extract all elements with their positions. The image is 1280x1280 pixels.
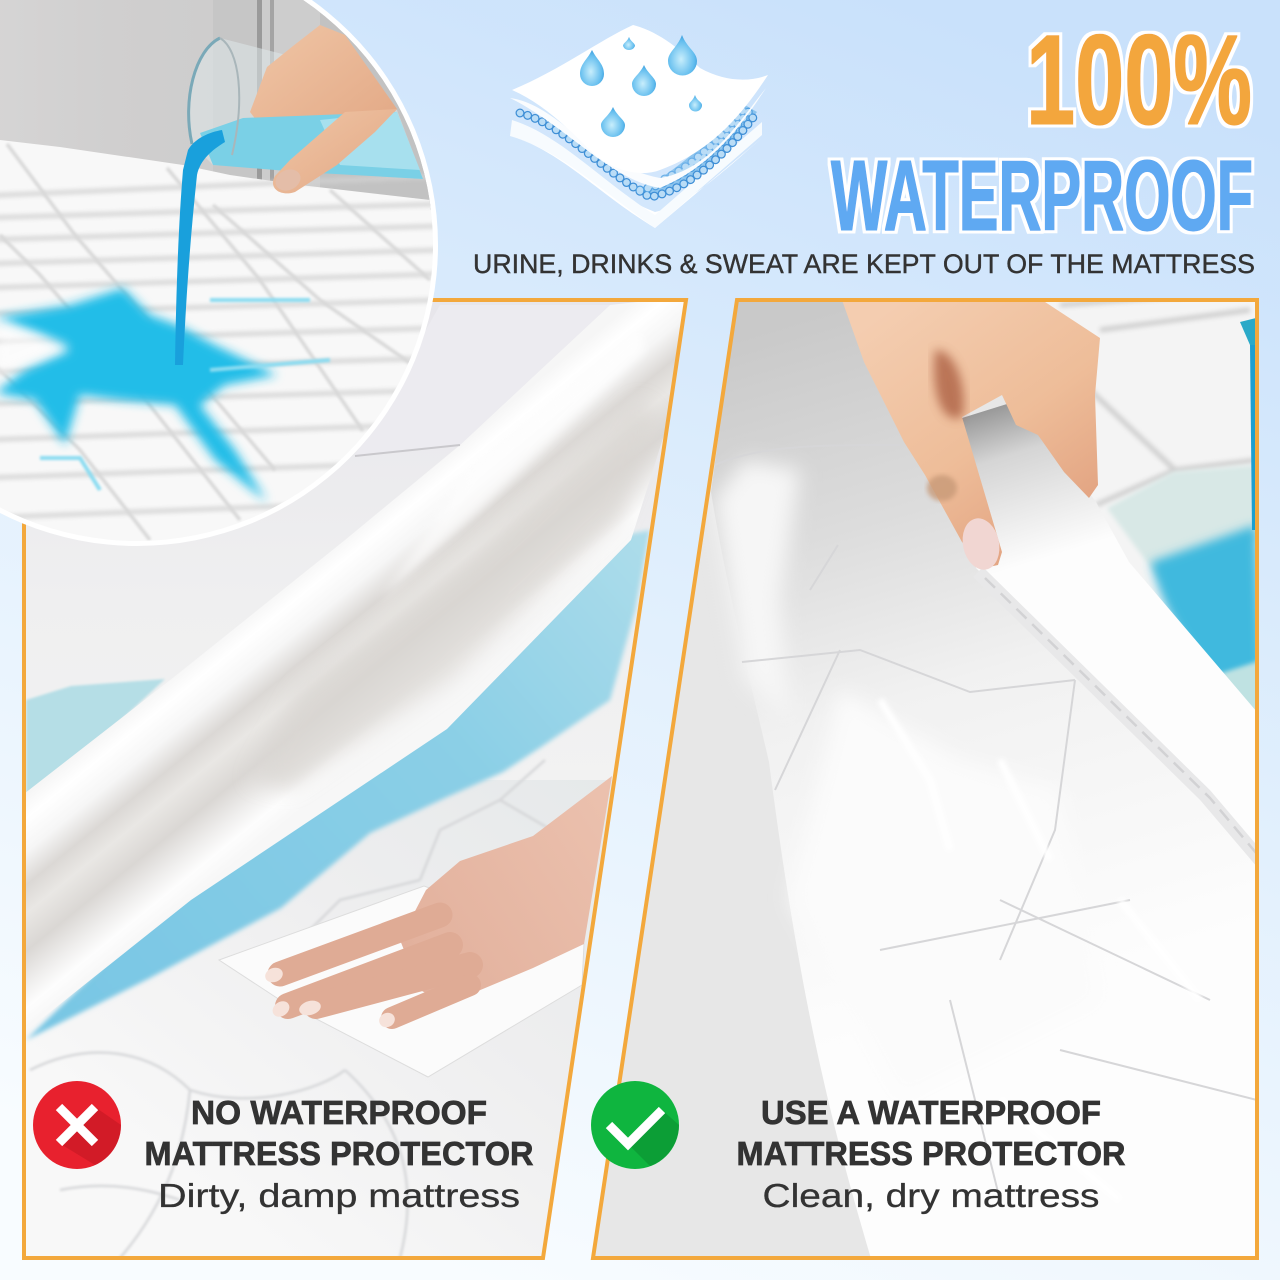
quilted mattress	[0, 140, 431, 210]
hand under sheet	[219, 776, 612, 1077]
splash	[0, 288, 277, 502]
raised edge roll	[962, 400, 1262, 860]
quilted top mattress	[1046, 302, 1255, 599]
second sheet	[510, 88, 766, 188]
caption: no waterproof protector	[144, 1094, 534, 1214]
glass of water	[190, 39, 410, 164]
caption: use waterproof protector	[736, 1094, 1126, 1214]
inset circle: water poured on mattress	[0, 0, 450, 560]
caption: no waterproof protector: Dirty, damp mattress	[158, 1177, 520, 1214]
caption: no waterproof protector: MATTRESS PROTECTOR	[144, 1135, 534, 1172]
caption: use waterproof protector: USE A WATERPROOF	[761, 1094, 1101, 1131]
top sheet	[512, 25, 768, 173]
caption: no waterproof protector: NO WATERPROOF	[191, 1094, 487, 1131]
stream	[175, 130, 225, 365]
right panel border	[593, 300, 1257, 1258]
thumb	[273, 109, 397, 193]
icon: green check	[591, 1081, 679, 1169]
icon: red cross	[33, 1081, 121, 1169]
quilt seams on protector	[742, 551, 1255, 1196]
white folded protector	[711, 300, 1262, 1262]
panel: no waterproof protector	[20, 296, 690, 1258]
panel: use waterproof protector	[593, 290, 1262, 1262]
caption: use waterproof protector: Clean, dry mattress	[762, 1177, 1100, 1214]
hand	[842, 300, 1100, 568]
left panel border	[24, 300, 686, 1258]
hand behind glass	[250, 25, 397, 118]
blue stain under sheet	[26, 530, 650, 1040]
sheet flap	[20, 296, 690, 1036]
icon: layered fabric with water drops	[510, 25, 768, 228]
caption: use waterproof protector: MATTRESS PROTECTOR	[736, 1135, 1126, 1172]
drops	[580, 50, 604, 86]
subheading: URINE, DRINKS & SWEAT ARE KEPT OUT OF THE MATTRESS	[473, 249, 1255, 279]
